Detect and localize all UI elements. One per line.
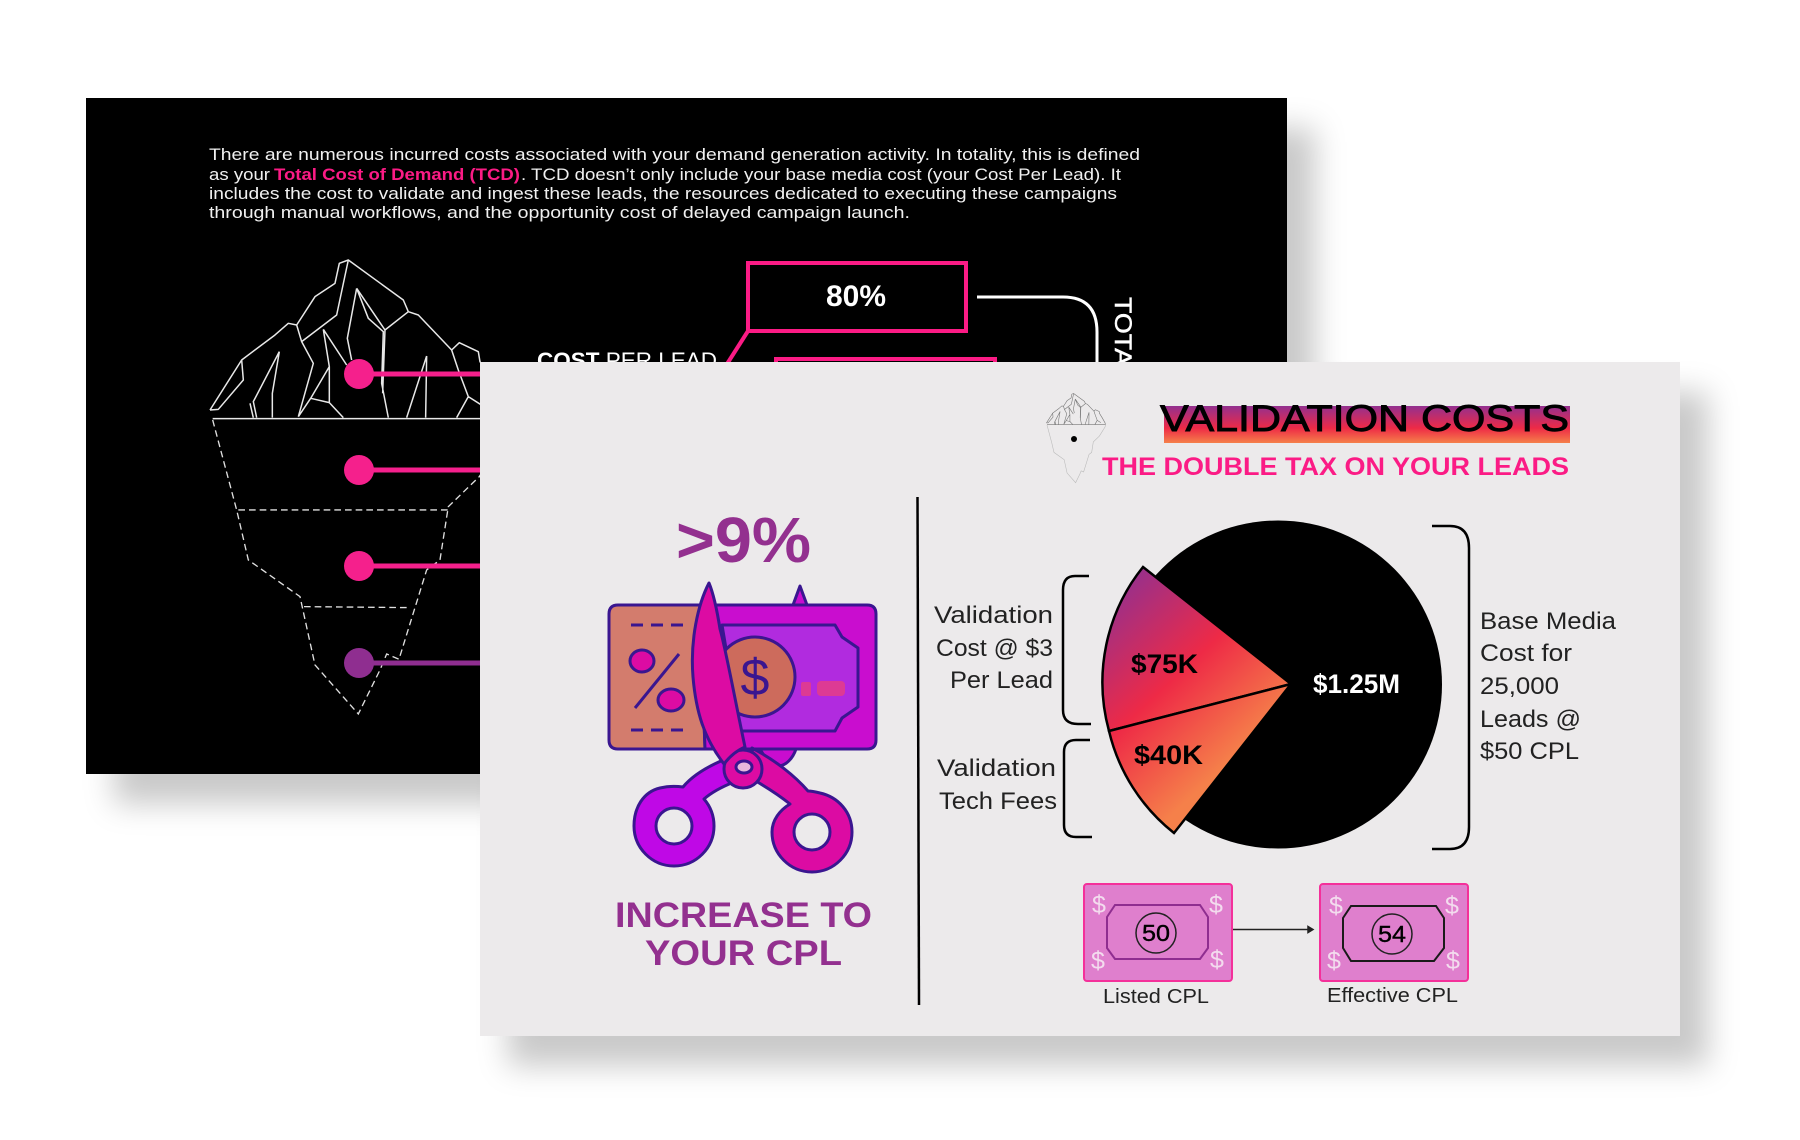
icon: scissors cutting banknote: $	[741, 649, 770, 707]
bracket and label: validation cost per lead: Validation	[934, 602, 1053, 629]
pie chart: $40K	[1134, 740, 1204, 770]
intro paragraph: Total Cost of Demand (TCD)	[274, 165, 520, 184]
icon: listed CPL banknote: $	[1091, 947, 1105, 975]
icon: listed CPL banknote: $	[1210, 946, 1224, 974]
vertical total label: TOTAL	[1109, 297, 1136, 381]
label: effective CPL: Effective CPL	[1327, 985, 1458, 1007]
intro paragraph: There are numerous incurred costs associated with your demand generation activity. In totality, this is defined	[209, 145, 1140, 164]
subheading: THE DOUBLE TAX ON YOUR LEADS	[1102, 453, 1569, 481]
icon: effective CPL banknote	[1320, 884, 1468, 981]
icon: listed CPL banknote	[1084, 884, 1232, 981]
bracket and label: validation tech fees	[937, 740, 1092, 837]
bracket and label: validation cost per lead: Cost @ $3	[936, 635, 1053, 662]
bracket and label: validation cost per lead	[934, 576, 1091, 724]
bracket and label: base media cost: Cost for	[1480, 640, 1572, 667]
pie chart: $1.25M	[1313, 669, 1400, 699]
bracket and label: validation tech fees: Tech Fees	[939, 788, 1057, 815]
80% callout box	[727, 263, 966, 364]
icon: effective CPL banknote: $	[1445, 892, 1459, 920]
stat: more than 9%: >9%	[676, 504, 811, 576]
bracket and label: base media cost: 25,000	[1480, 673, 1559, 700]
panel: validation costs (light slide)	[480, 362, 1680, 1036]
small iceberg icon	[1046, 393, 1105, 483]
bracket and label: validation cost per lead: Per Lead	[950, 667, 1053, 694]
vertical divider	[918, 497, 919, 1005]
heading: validation costs: VALIDATION COSTS	[1160, 398, 1569, 439]
caption: increase to your CPL: INCREASE TO	[615, 896, 872, 935]
bracket and label: validation tech fees: Validation	[937, 755, 1056, 782]
intro paragraph: as your	[209, 165, 270, 184]
total bracket	[977, 297, 1097, 365]
arrow from listed to effective CPL	[1233, 926, 1313, 932]
icon: listed CPL banknote: $	[1209, 891, 1223, 919]
80% callout box: 80%	[826, 280, 886, 313]
cost per lead label: COST PER LEAD	[537, 348, 717, 373]
icon: listed CPL banknote: $	[1092, 891, 1106, 919]
icon: effective CPL banknote: $	[1329, 892, 1343, 920]
bracket and label: base media cost	[1432, 526, 1617, 849]
icon: effective CPL banknote: $	[1327, 947, 1341, 975]
icon: effective CPL banknote: $	[1446, 947, 1460, 975]
label: listed CPL: Listed CPL	[1103, 986, 1209, 1008]
intro paragraph: includes the cost to validate and ingest these leads, the resources dedicated to executing these campaigns	[209, 184, 1117, 203]
intro paragraph: through manual workflows, and the opportunity cost of delayed campaign launch.	[209, 203, 910, 222]
bracket and label: base media cost: $50 CPL	[1480, 738, 1579, 765]
pie chart: $75K	[1131, 649, 1199, 679]
iceberg illustration	[210, 260, 510, 714]
intro paragraph: . TCD doesn’t only include your base media cost (your Cost Per Lead). It	[521, 165, 1121, 184]
icon: listed CPL banknote: 50	[1142, 920, 1170, 946]
caption: increase to your CPL: YOUR CPL	[645, 934, 842, 973]
pie chart	[1102, 520, 1442, 848]
iceberg level markers	[344, 359, 480, 678]
icon: scissors cutting banknote	[609, 583, 876, 872]
icon: effective CPL banknote: 54	[1378, 921, 1406, 947]
bracket and label: base media cost: Leads @	[1480, 706, 1581, 733]
second pink box	[776, 359, 995, 389]
bracket and label: base media cost: Base Media	[1480, 608, 1617, 635]
caption: increase to your CPL	[615, 896, 872, 973]
intro paragraph	[209, 145, 1140, 222]
panel: total cost of demand (black slide)	[86, 98, 1287, 774]
